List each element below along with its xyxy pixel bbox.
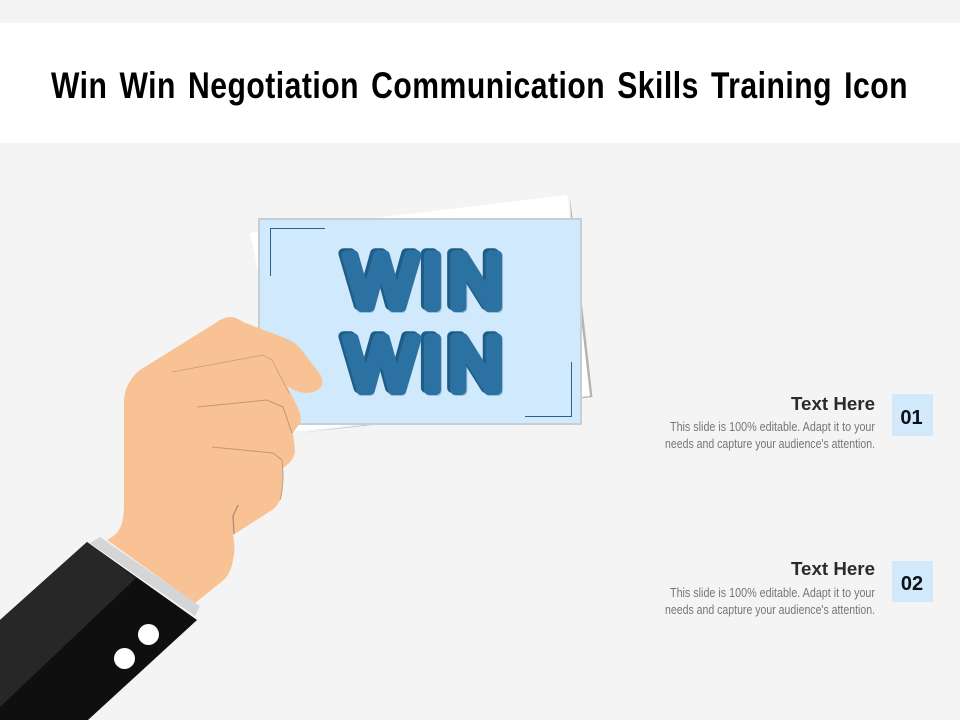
number badge 01: 01 xyxy=(900,407,923,429)
body 02: needs and capture your audience's attention. xyxy=(665,602,875,617)
win text bottom: WIN xyxy=(343,320,500,404)
body 02 xyxy=(665,585,876,617)
body 01: needs and capture your audience's attention. xyxy=(665,436,875,451)
illustration: jacket sleeve xyxy=(0,542,197,720)
number badge 02 xyxy=(892,561,933,602)
win text top: WIN xyxy=(343,237,500,321)
illustration: shirt cuff xyxy=(90,537,200,616)
text block 02 xyxy=(665,559,876,617)
heading 01: Text Here xyxy=(791,394,875,414)
win text top: WIN xyxy=(346,240,504,324)
title band xyxy=(0,23,960,143)
win text bottom: WIN xyxy=(346,323,504,407)
heading 02: Text Here xyxy=(791,559,875,579)
body 02: This slide is 100% editable. Adapt it to your xyxy=(670,585,876,600)
text block 01 xyxy=(665,394,876,451)
illustration: back sheet of paper xyxy=(250,195,592,434)
number badge 01 xyxy=(892,394,933,436)
number badge 02: 02 xyxy=(901,573,923,595)
illustration: win win card xyxy=(259,219,581,424)
win text bottom: WIN xyxy=(346,322,503,406)
win text top: WIN xyxy=(346,239,503,323)
illustration: hand xyxy=(107,317,322,603)
icon: sleeve buttons xyxy=(114,624,159,669)
body 01: This slide is 100% editable. Adapt it to your xyxy=(670,419,876,434)
body 01 xyxy=(665,419,876,451)
